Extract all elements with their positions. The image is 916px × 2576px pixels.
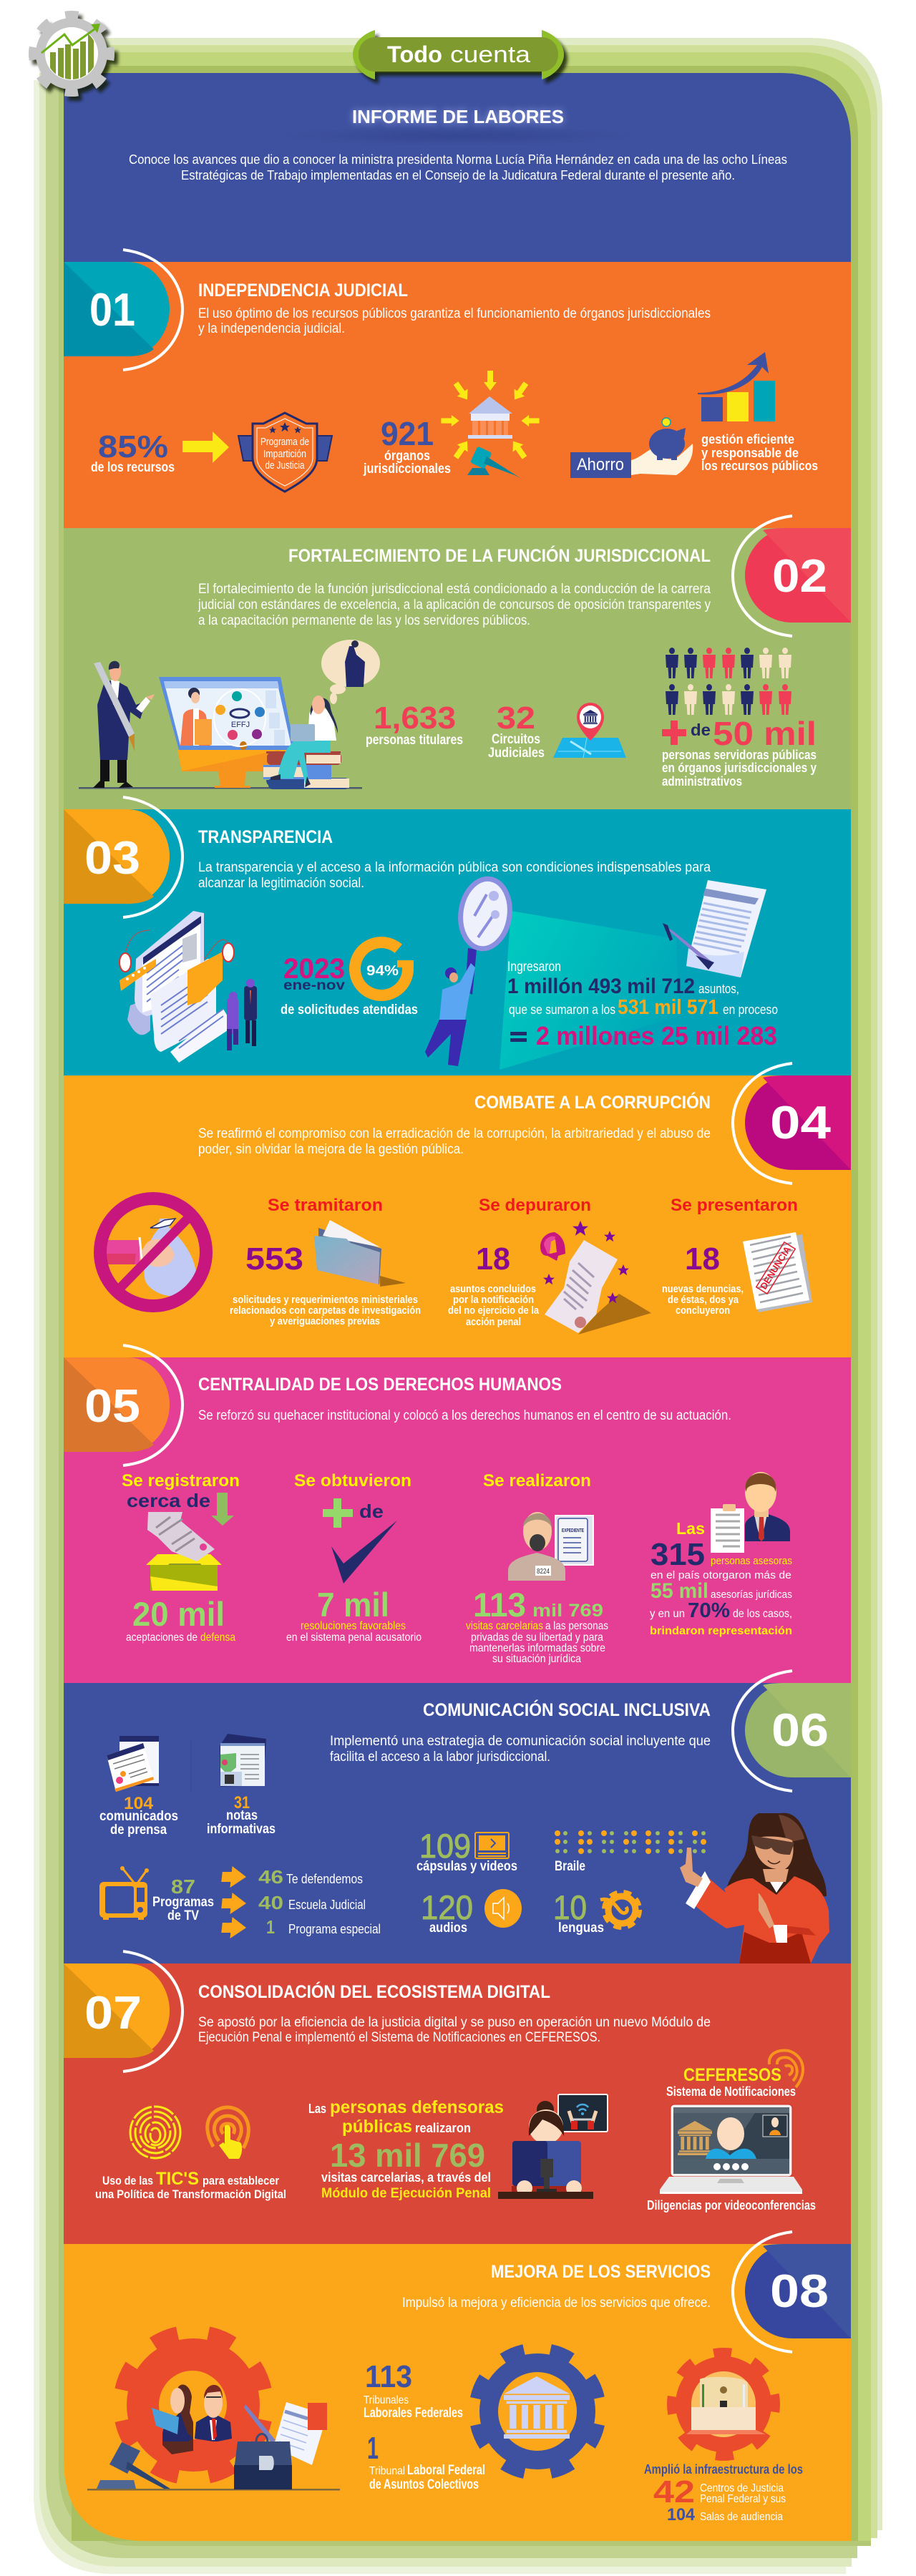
stat: se presentaron: 18 (685, 1241, 720, 1277)
stat: mas de 50 mil: en órganos jurisdiccionales y (662, 761, 817, 775)
arrow: yellow (182, 431, 229, 463)
text 02: judicial con estándares de excelencia, a la aplicación de concursos de oposición transparentes y (198, 597, 711, 613)
icon: folder (314, 1220, 406, 1287)
text: uso de las tic's: TIC'S (156, 2169, 199, 2189)
stat: las 315 personas asesoras: personas asesoras (711, 1555, 792, 1567)
heading: informe de labores: INFORME DE LABORES (352, 106, 564, 127)
text 07 (198, 2015, 711, 2045)
stat: se obtuvieron (286, 1471, 422, 1644)
stat: se presentaron (662, 1196, 798, 1317)
stat: se realizaron: visitas carcelarias (466, 1620, 543, 1632)
stat: se realizaron (466, 1471, 608, 1665)
panel: 05 derechos humanos (64, 1345, 851, 1683)
panel: 06 comunicacion social inclusiva (64, 1671, 851, 1963)
text: amplio la infraestructura: 42 (653, 2474, 695, 2509)
text 07: Se apostó por la eficiencia de la justicia digital y se puso en operación un nuevo Módulo de (198, 2015, 711, 2030)
text: personas defensoras publicas (308, 2097, 504, 2201)
icon: blue gear with courthouse (464, 2338, 610, 2484)
stat: las 315 personas asesoras: Las (676, 1519, 705, 1538)
badge 04 (733, 1063, 851, 1184)
stat: 32 circuitos judiciales: Circuitos (492, 732, 540, 747)
stat: 85% de los recursos: 85% (98, 429, 168, 464)
stat: se obtuvieron: de (359, 1501, 384, 1522)
arrows: tv program breakdown (220, 1866, 248, 1938)
text 04: Se reafirmó el compromiso con la erradicación de la corrupción, la arbitrariedad y el abuso de (198, 1126, 711, 1141)
stat: 921 organos jurisdiccionales: 921 (381, 415, 434, 452)
stat: las 315 personas asesoras: 70% (688, 1599, 730, 1622)
chart: donut 94%: 94% (366, 963, 399, 979)
stat: 1 tribunal: Tribunal (369, 2465, 405, 2477)
text: ceferesos sistema de notificaciones (666, 2051, 803, 2099)
stat: se tramitaron: Se tramitaron (268, 1196, 383, 1215)
stat: se tramitaron: solicitudes y requerimientos ministeriales (233, 1294, 418, 1306)
text: personas defensoras publicas: personas defensoras (330, 2097, 504, 2117)
icon: informative notes (220, 1734, 266, 1787)
stat: se realizaron: su situación jurídica (492, 1653, 581, 1665)
stat: 104 comunicados: comunicados (99, 1809, 178, 1824)
stat: 109 capsulas y videos: cápsulas y videos (416, 1859, 517, 1874)
icon: red gear with courtroom (665, 2346, 782, 2463)
badge 01: 01 (89, 283, 135, 336)
stat: 1 tribunal: 1 (367, 2431, 379, 2466)
icon: denuncia document: DENUNCIA (758, 1244, 793, 1292)
badge 05: 05 (84, 1380, 140, 1432)
stat: 104 comunicados: de prensa (110, 1823, 167, 1838)
stat: 87 programas de tv: de TV (167, 1908, 199, 1923)
stat: 109 capsulas y videos: 109 (419, 1827, 471, 1865)
text 07: Ejecución Penal e implementó el Sistema de Notificaciones en CEFERESOS. (198, 2030, 600, 2045)
stat: 87 programas de tv: Programas (152, 1895, 214, 1910)
stat: 85% de los recursos (91, 429, 175, 475)
icon: people rows (666, 648, 791, 715)
stat: 31 notas: 31 (234, 1793, 250, 1813)
text: gestion eficiente: y responsable de (701, 446, 799, 460)
text 02 (198, 582, 711, 628)
chart: donut 94% (355, 942, 414, 995)
intro text (129, 152, 787, 182)
text: ingresaron: 531 mil 571 (618, 996, 718, 1019)
text 06: Implementó una estrategia de comunicación social incluyente que (330, 1734, 711, 1749)
banner: todo cuenta: cuenta (450, 42, 530, 67)
icon: braille dots (555, 1830, 706, 1874)
illustration: document and pen (663, 880, 766, 977)
stat: 120 audios (421, 1888, 522, 1936)
stat: se depuraron: 18 (476, 1241, 510, 1277)
icon: denuncia document (743, 1232, 812, 1312)
text 06: facilita el acceso a la labor jurisdiccional. (330, 1750, 550, 1765)
stat: se tramitaron: y averiguaciones previas (270, 1315, 380, 1327)
text 04: poder, sin olvidar la mejora de la gestión pública. (198, 1142, 464, 1157)
stat: se presentaron: nuevas denuncias, (662, 1283, 744, 1295)
stat: se tramitaron: relacionados con carpetas de investigación (230, 1304, 421, 1317)
stat: las 315 personas asesoras: asesorías jurídicas (711, 1589, 792, 1601)
stat: 921 organos jurisdiccionales (363, 415, 451, 477)
badge 02: 02 (772, 550, 827, 602)
text: uso de las tic's: para establecer (203, 2174, 279, 2187)
badge 01 (64, 250, 182, 370)
icon: courthouse (468, 396, 512, 439)
stat: 120 audios: 120 (421, 1888, 473, 1926)
illustration: documents and handshake (120, 911, 257, 1063)
illustration: laptop videoconference (660, 2104, 802, 2194)
stat: 85% de los recursos: de los recursos (91, 460, 175, 475)
stat: se realizaron: privadas de su libertad y para (471, 1631, 603, 1644)
stat: 113 tribunales (364, 2359, 463, 2421)
icon: shield programa de imparticion de justicia: Impartición (263, 448, 306, 460)
badge 06 (733, 1671, 851, 1791)
stat: se realizaron: mantenerlas informadas sobre (469, 1642, 605, 1654)
stat: 1,633 personas titulares (366, 701, 463, 748)
stat: se registraron: 20 mil (132, 1595, 225, 1633)
text 01: El uso óptimo de los recursos públicos garantiza el funcionamiento de órganos jurisdiccionales (198, 306, 711, 321)
list: tv programs: 40 (258, 1892, 283, 1913)
intro text: Estratégicas de Trabajo implementadas en el Consejo de la Judicatura Federal durante el presente año. (181, 168, 735, 182)
badge 08 (733, 2232, 851, 2352)
stat: 31 notas: notas (226, 1808, 258, 1823)
stat: las 315 personas asesoras: y en un (650, 1608, 685, 1620)
text: personas defensoras publicas: visitas carcelarias, a través del (321, 2170, 491, 2185)
heading 02: FORTALECIMIENTO DE LA FUNCIÓN JURISDICCIONAL (288, 545, 711, 566)
stat: 113 tribunales: 113 (365, 2359, 412, 2394)
panel: 07 ecosistema digital (64, 1951, 851, 2244)
list: tv programs: 1 (266, 1916, 275, 1938)
illustration: public defender at podium (498, 2094, 608, 2199)
heading 03: TRANSPARENCIA (198, 827, 333, 847)
text: amplio la infraestructura: Centros de Justicia (700, 2482, 784, 2494)
text: gestion eficiente: gestión eficiente (701, 432, 794, 447)
stat: se realizaron: 113 (473, 1586, 526, 1624)
text: diligencias: Diligencias por videoconferencias (647, 2198, 816, 2212)
text: ingresaron: asuntos, (698, 982, 739, 996)
icon: scroll with stars (540, 1221, 651, 1335)
list: tv programs: Escuela Judicial (288, 1898, 366, 1912)
stat: 2023 ene-nov: ene-nov (283, 978, 345, 993)
stat: se depuraron (448, 1196, 591, 1328)
stat: se realizaron: 8224 (537, 1568, 550, 1576)
stat: se obtuvieron: 7 mil (317, 1586, 389, 1624)
badge 08: 08 (770, 2265, 829, 2317)
stat: las 315 personas asesoras: en el país otorgaron más de (651, 1569, 791, 1581)
stat: se presentaron: concluyeron (676, 1304, 730, 1317)
stat: las 315 personas asesoras: de los casos, (733, 1608, 792, 1620)
icon: braille dots: Braile (555, 1859, 585, 1874)
stat: 1 tribunal: de Asuntos Colectivos (369, 2477, 479, 2492)
badge 02 (733, 516, 851, 636)
stat: 10 lenguas (553, 1888, 640, 1936)
panel: 08 mejora de los servicios (64, 2232, 851, 2541)
stat: 31 notas (207, 1793, 276, 1837)
text: personas defensoras publicas: 13 mil 769 (330, 2137, 485, 2174)
text 02: a la capacitación permanente de las y los servidores públicos. (198, 613, 530, 628)
stat: 32 circuitos judiciales: Judiciales (488, 746, 545, 761)
stat: 31 notas: informativas (207, 1822, 276, 1837)
text 03: alcanzar la legitimación social. (198, 876, 364, 891)
icon: prohibited bribe (100, 1199, 206, 1306)
banner: todo cuenta (353, 30, 564, 79)
heading 06: COMUNICACIÓN SOCIAL INCLUSIVA (423, 1699, 711, 1720)
stat: 10 lenguas: lenguas (558, 1921, 604, 1936)
panel: 01 independencia judicial (64, 250, 851, 528)
logo: gear with growth chart (27, 9, 116, 98)
icon: shield programa de imparticion de justicia: de Justicia (265, 459, 305, 472)
badge 04: 04 (770, 1096, 831, 1148)
stat: las 315 personas asesoras (650, 1472, 792, 1637)
stat: se realizaron: EXPEDIENTE (562, 1528, 584, 1533)
text: ingresaron (507, 960, 778, 1050)
stat: se tramitaron (230, 1196, 421, 1327)
text 03: La transparencia y el acceso a la información pública son condiciones indispensables para (198, 860, 711, 875)
text: uso de las tic's (95, 2169, 286, 2201)
stat: 113 tribunales: Laborales Federales (364, 2406, 463, 2421)
text 05: Se reforzó su quehacer institucional y colocó a los derechos humanos en el centro de su actuación. (198, 1408, 731, 1423)
stat: mas de 50 mil: de (691, 721, 711, 739)
icon: ahorro hand and piggy: Ahorro (577, 455, 624, 474)
heading 07: CONSOLIDACIÓN DEL ECOSISTEMA DIGITAL (198, 1981, 550, 2002)
illustration: judge and study monitor (79, 640, 380, 789)
text: amplio la infraestructura (644, 2462, 803, 2524)
stat: se registraron (122, 1471, 240, 1644)
stat: las 315 personas asesoras: brindaron representación (650, 1625, 792, 1637)
stat: se depuraron: por la notificación (453, 1294, 534, 1306)
stat: las 315 personas asesoras: 315 (651, 1537, 705, 1572)
icon: touch signal (208, 2107, 248, 2159)
stat: se obtuvieron: en el sistema penal acusatorio (286, 1631, 422, 1644)
stat: 32 circuitos judiciales: 32 (497, 701, 535, 736)
stat: se depuraron: Se depuraron (479, 1196, 591, 1215)
text: ingresaron: en proceso (723, 1002, 778, 1017)
heading 01: INDEPENDENCIA JUDICIAL (198, 280, 408, 301)
illustration: light beam (500, 911, 680, 1070)
stat: 87 programas de tv (152, 1875, 214, 1923)
icon: arrows converge on courthouse (441, 371, 540, 462)
stat: 2023 ene-nov: 2023 (283, 953, 345, 985)
badge 03 (64, 797, 182, 917)
stat: se registraron: aceptaciones de (126, 1631, 198, 1644)
icon: press releases (107, 1736, 159, 1792)
illustration: gear with team, gavel, briefcase (87, 2320, 340, 2490)
panel: 03 transparencia (64, 797, 851, 1075)
stat: 120 audios: audios (429, 1921, 467, 1936)
badge 07: 07 (84, 1986, 142, 2039)
text 01 (198, 306, 711, 336)
text: amplio la infraestructura: Salas de audiencia (700, 2511, 783, 2523)
stat: se tramitaron: 553 (245, 1241, 303, 1277)
stat: se obtuvieron: Se obtuvieron (294, 1471, 411, 1491)
text: uso de las tic's: Uso de las (102, 2174, 153, 2187)
icon: map pin (553, 703, 626, 758)
icon: ahorro hand and piggy (570, 418, 693, 478)
heading 08: MEJORA DE LOS SERVICIOS (491, 2262, 711, 2282)
text: gestion eficiente: los recursos públicos (701, 459, 818, 473)
stat: se obtuvieron: resoluciones favorables (301, 1620, 406, 1632)
stat: se registraron: defensa (200, 1631, 235, 1644)
badge 07 (64, 1951, 182, 2072)
list: tv programs: Te defendemos (286, 1872, 363, 1886)
stat: mas de 50 mil: personas servidoras públicas (662, 748, 817, 762)
text 02: El fortalecimiento de la función jurisdiccional está condicionado a la conducción de la carrera (198, 582, 711, 597)
panel: intro (64, 73, 851, 262)
text: amplio la infraestructura: Penal Federal y sus (700, 2493, 786, 2505)
stat: 104 comunicados (99, 1794, 178, 1838)
stat: 10 lenguas: 10 (553, 1888, 587, 1926)
list: tv programs (258, 1866, 381, 1938)
text 06 (330, 1734, 711, 1765)
text: de solicitudes atendidas: de solicitudes atendidas (281, 1002, 418, 1018)
text: amplio la infraestructura: 104 (667, 2505, 696, 2524)
decorative divider (190, 1741, 192, 1791)
stat: 113 tribunales: Tribunales (364, 2394, 409, 2406)
text: personas defensoras publicas: Módulo de Ejecución Penal (321, 2186, 491, 2201)
stat: se registraron: Se registraron (122, 1471, 240, 1491)
text: personas defensoras publicas: realizaron (415, 2121, 471, 2135)
stat: las 315 personas asesoras: 55 mil (651, 1579, 708, 1603)
icon: shield programa de imparticion de justicia: Programa de (260, 436, 309, 448)
text 04 (198, 1126, 711, 1157)
text: uso de las tic's: una Política de Transformación Digital (95, 2187, 286, 2201)
icon: shield programa de imparticion de justicia (238, 413, 332, 492)
badge 05 (64, 1345, 182, 1465)
stat: 109 capsulas y videos (416, 1827, 517, 1874)
stat: se depuraron: del no ejercicio de la (448, 1304, 540, 1317)
text: amplio la infraestructura: Amplió la infraestructura de los (644, 2462, 803, 2477)
badge 03: 03 (84, 831, 140, 884)
list: tv programs: 46 (258, 1866, 283, 1888)
stat: se depuraron: acción penal (466, 1316, 521, 1328)
text: ceferesos sistema de notificaciones: CEFERESOS (683, 2065, 781, 2085)
text: personas defensoras publicas: públicas (342, 2117, 412, 2137)
stat: se presentaron: Se presentaron (671, 1196, 798, 1215)
text: ingresaron: 1 millón 493 mil 712 (507, 975, 695, 998)
stat: se realizaron: a las personas (545, 1620, 608, 1632)
text: ceferesos sistema de notificaciones: Sistema de Notificaciones (666, 2084, 796, 2099)
text: ingresaron: Ingresaron (507, 960, 561, 975)
text 03 (198, 860, 711, 891)
stat: 1,633 personas titulares: 1,633 (374, 701, 456, 736)
intro text: Conoce los avances que dio a conocer la ministra presidenta Norma Lucía Piña Hernández en cada una de las ocho Líneas (129, 152, 787, 167)
heading 05: CENTRALIDAD DE LOS DERECHOS HUMANOS (198, 1375, 562, 1395)
icon: gavel (467, 447, 520, 478)
text: ingresaron: que se sumaron a los (509, 1002, 615, 1017)
stat: mas de 50 mil (662, 715, 817, 789)
illustration: judge and study monitor: EFFJ (231, 721, 250, 729)
stat: se registraron: cerca de (127, 1490, 210, 1511)
stat: 1,633 personas titulares: personas titulares (366, 733, 463, 748)
stat: se realizaron: Se realizaron (483, 1471, 591, 1491)
icon: fingerprint (130, 2107, 180, 2158)
panel: 04 combate a la corrupcion (64, 1063, 851, 1357)
badge 06: 06 (771, 1704, 829, 1756)
text: gestion eficiente (701, 432, 818, 473)
stat: se realizaron: mil 769 (532, 1601, 603, 1621)
illustration: woman with sunglasses pointing (680, 1813, 829, 1963)
text 01: y la independencia judicial. (198, 321, 345, 336)
stat: 1 tribunal (367, 2431, 485, 2492)
stat: 921 organos jurisdiccionales: jurisdiccionales (363, 462, 451, 477)
stat: 104 comunicados: 104 (124, 1794, 154, 1813)
text: ingresaron: 2 millones 25 mil 283 (536, 1021, 777, 1050)
stat: mas de 50 mil: 50 mil (713, 715, 817, 752)
icon: television (99, 1866, 149, 1920)
text: personas defensoras publicas: Las (308, 2102, 326, 2116)
list: tv programs: Programa especial (288, 1922, 381, 1936)
stat: se presentaron: de éstas, dos ya (668, 1294, 739, 1306)
stat: 921 organos jurisdiccionales: órganos (384, 449, 430, 464)
stat: mas de 50 mil: administrativos (662, 774, 742, 789)
banner: todo cuenta: Todo (387, 42, 442, 67)
stat: 1 tribunal: Laboral Federal (407, 2463, 485, 2478)
stat: 32 circuitos judiciales (488, 701, 545, 761)
text 08: Impulsó la mejora y eficiencia de los servicios que ofrece. (402, 2296, 711, 2311)
stat: 87 programas de tv: 87 (171, 1875, 195, 1898)
heading 04: COMBATE A LA CORRUPCIÓN (474, 1091, 711, 1113)
icon: bars with growth arrow (698, 352, 775, 421)
illustration: person with magnifier (425, 876, 514, 1066)
stat: se depuraron: asuntos concluidos (450, 1283, 536, 1295)
panel: 02 fortalecimiento (64, 516, 851, 809)
